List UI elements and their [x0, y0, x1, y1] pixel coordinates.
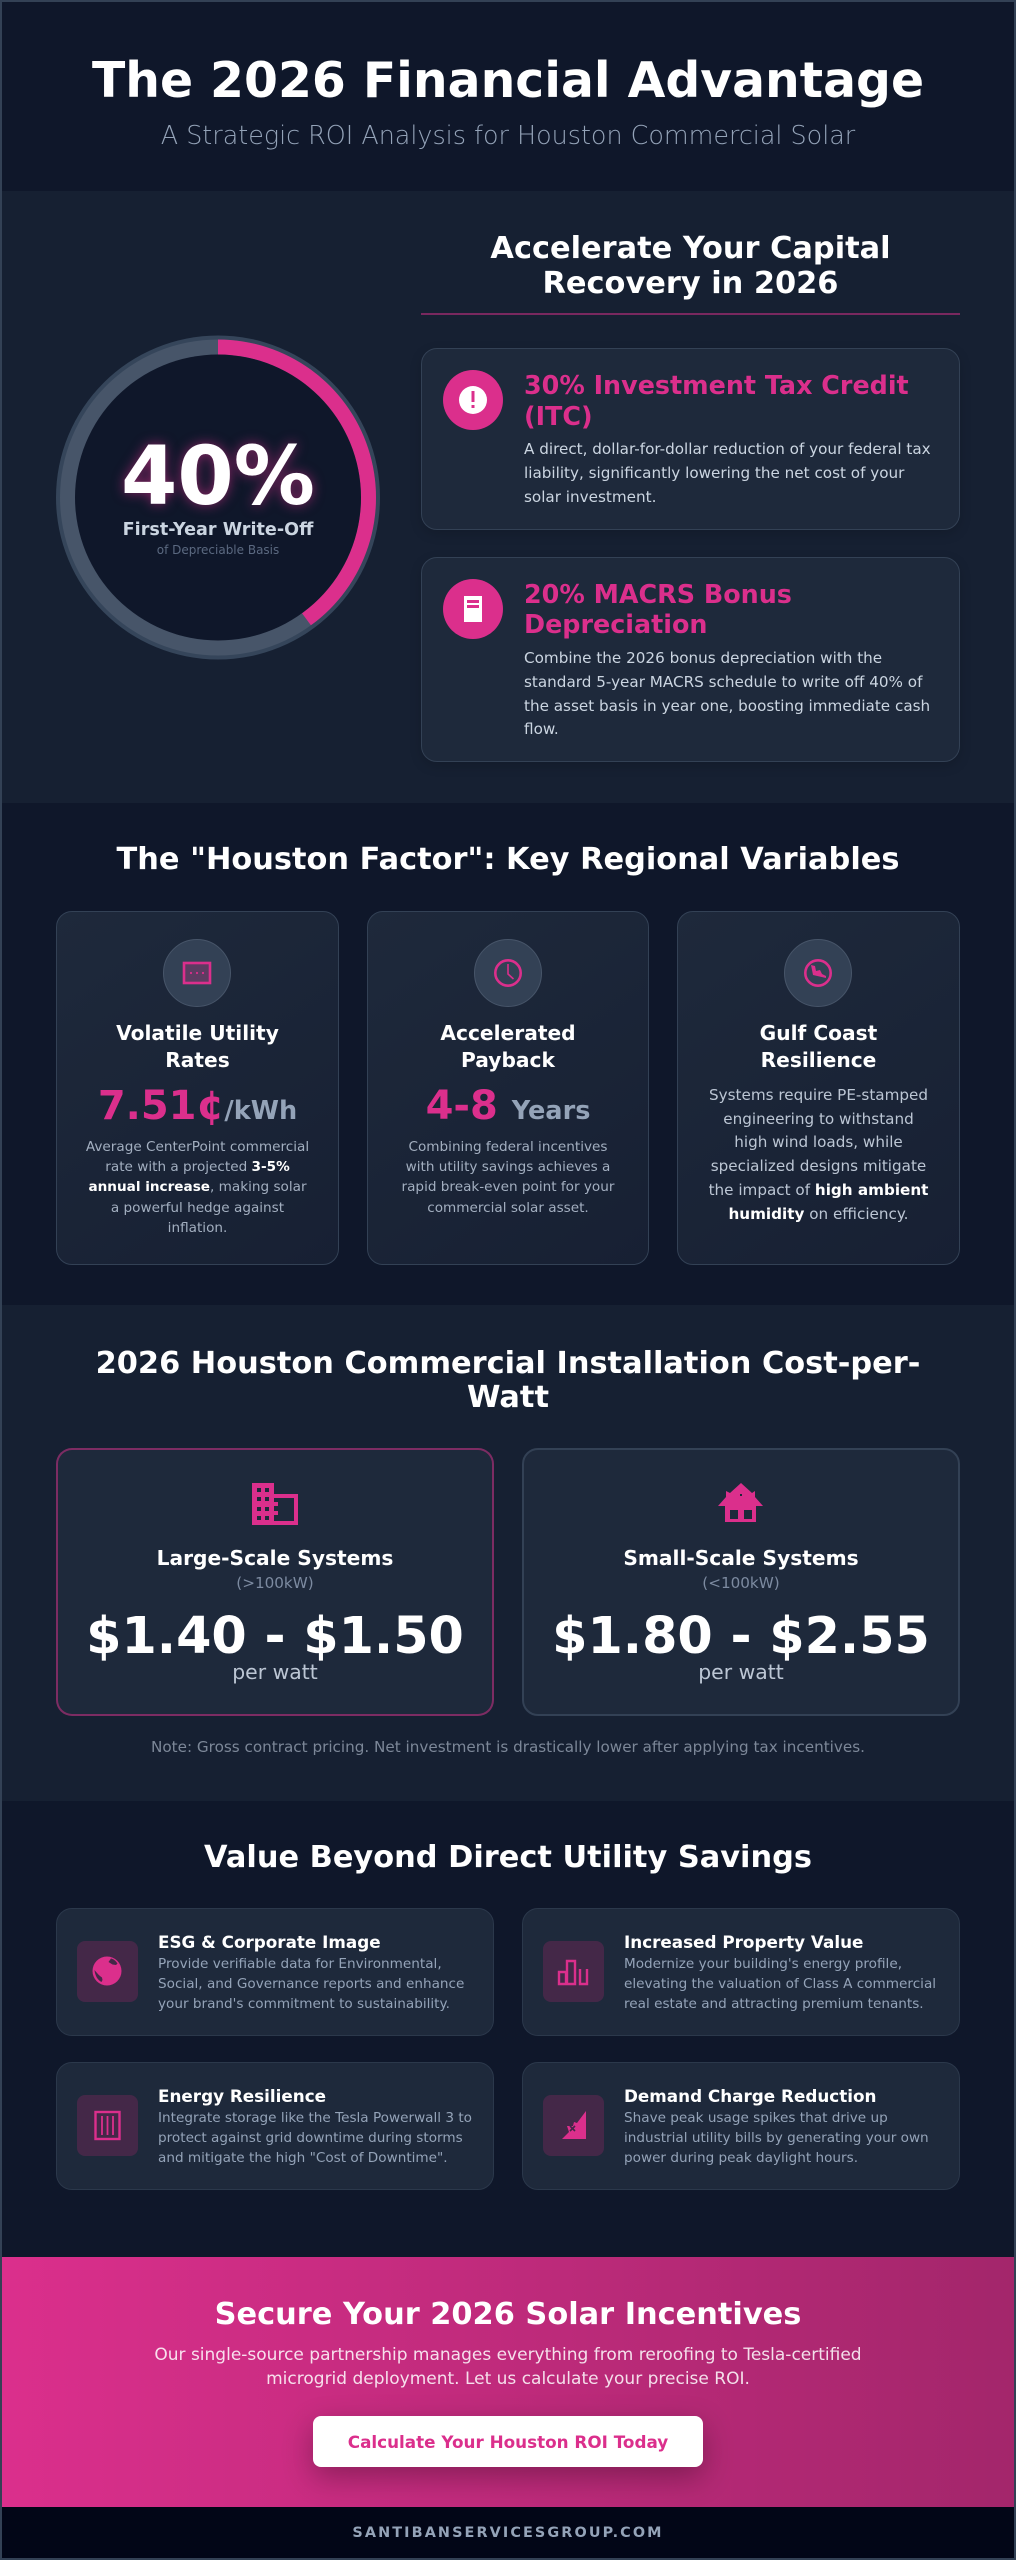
card text: Systems require PE-stamped — [709, 1086, 928, 1104]
price range: $1.40 - $1.50 — [86, 1606, 464, 1665]
card title: Increased Property Value — [624, 1932, 863, 1952]
card text: commercial solar asset. — [427, 1200, 589, 1216]
card text — [524, 440, 931, 506]
card: large-scale systems — [56, 1448, 494, 1716]
card text: the impact of high ambient — [709, 1181, 928, 1199]
call to action banner — [0, 2257, 1016, 2507]
card text: A direct, dollar-for-dollar reduction of your federal tax — [524, 440, 931, 458]
card: volatile utility rates — [56, 911, 339, 1265]
header panel — [0, 0, 1016, 191]
card text: power during peak daylight hours. — [624, 2150, 858, 2166]
card title — [760, 1021, 877, 1072]
card text: Provide verifiable data for Environmental, — [158, 1956, 442, 1972]
card text — [624, 2110, 929, 2166]
card title: (ITC) — [524, 401, 593, 431]
card text: Combining federal incentives — [408, 1139, 608, 1155]
card text — [402, 1139, 614, 1216]
gauge: 40 percent write-off — [56, 336, 380, 660]
unit label: per watt — [698, 1660, 784, 1684]
card title: Payback — [461, 1048, 555, 1072]
card: property value — [522, 1908, 960, 2036]
card text: and mitigate the high "Cost of Downtime". — [158, 2150, 448, 2166]
footnote: Note: Gross contract pricing. Net investment is drastically lower after applying tax incentives. — [151, 1738, 865, 1756]
heading: Recovery in 2026 — [543, 266, 838, 301]
divider line — [421, 313, 960, 315]
card title — [524, 578, 792, 639]
icon: clock — [474, 939, 542, 1007]
card: investment tax credit — [421, 348, 960, 530]
card text: Combine the 2026 bonus depreciation with the — [524, 649, 882, 667]
button: Calculate Your Houston ROI Today — [348, 2432, 668, 2452]
card text: the asset basis in year one, boosting immediate cash — [524, 697, 930, 715]
card text: flow. — [524, 720, 559, 738]
card title: Small-Scale Systems — [623, 1546, 859, 1570]
card text: liability, significantly lowering the net cost of your — [524, 464, 904, 482]
icon: alert — [443, 370, 503, 430]
card text: Modernize your building's energy profile, — [624, 1956, 902, 1972]
subtitle: A Strategic ROI Analysis for Houston Commercial Solar — [161, 120, 855, 150]
card text: inflation. — [168, 1220, 227, 1236]
card text — [158, 1956, 464, 2012]
icon: peak shaving — [543, 2095, 604, 2156]
card text: Shave peak usage spikes that drive up — [624, 2110, 888, 2126]
card text — [524, 649, 930, 738]
card text — [158, 2110, 472, 2166]
footer: SANTIBANSERVICESGROUP.COM — [352, 2525, 664, 2541]
card title: Volatile Utility — [116, 1021, 279, 1045]
heading: Watt — [467, 1380, 549, 1415]
heading — [490, 231, 891, 301]
panel: Houston factor — [0, 803, 1016, 1305]
gauge label: First-Year Write-Off — [123, 520, 313, 540]
heading: 2026 Houston Commercial Installation Cost-per- — [96, 1346, 920, 1381]
panel: value beyond savings — [0, 1801, 1016, 2257]
icon: building — [252, 1483, 298, 1525]
card title: Demand Charge Reduction — [624, 2086, 876, 2106]
size range: (<100kW) — [702, 1574, 780, 1592]
card text — [624, 1956, 936, 2012]
card title: Resilience — [761, 1048, 876, 1072]
card title: Energy Resilience — [158, 2086, 326, 2106]
footer — [0, 2507, 1016, 2560]
card text: elevating the valuation of Class A commercial — [624, 1976, 936, 1992]
size range: (>100kW) — [236, 1574, 314, 1592]
card text: annual increase, making solar — [88, 1179, 307, 1195]
card text — [86, 1139, 309, 1236]
icon: meter — [163, 939, 231, 1007]
card: demand charge reduction — [522, 2062, 960, 2190]
card title: Gulf Coast — [760, 1021, 877, 1045]
heading: The "Houston Factor": Key Regional Variables — [117, 842, 899, 877]
card title: 20% MACRS Bonus — [524, 578, 792, 608]
card text: with utility savings achieves a — [406, 1159, 610, 1175]
card: ESG — [56, 1908, 494, 2036]
card text: engineering to withstand — [723, 1110, 914, 1128]
panel: cost per watt — [0, 1305, 1016, 1801]
card text: rate with a projected 3-5% — [105, 1159, 290, 1175]
icon: battery — [77, 2095, 138, 2156]
button — [313, 2416, 703, 2467]
icon: bar chart — [543, 1941, 604, 2002]
body text: microgrid deployment. Let us calculate your precise ROI. — [266, 2369, 750, 2389]
card text: standard 5-year MACRS schedule to write off 40% of — [524, 673, 922, 691]
card: MACRS bonus depreciation — [421, 557, 960, 762]
panel: capital recovery — [0, 191, 1016, 803]
gauge sublabel: of Depreciable Basis — [157, 543, 279, 557]
card text: a powerful hedge against — [111, 1200, 284, 1216]
card text: high wind loads, while — [734, 1133, 903, 1151]
card text: your brand's commitment to sustainability. — [158, 1996, 450, 2012]
card title — [524, 370, 909, 431]
gauge value: 40% — [121, 430, 315, 524]
price range: $1.80 - $2.55 — [552, 1606, 930, 1665]
card text: humidity on efficiency. — [728, 1205, 909, 1223]
card title: Rates — [165, 1048, 230, 1072]
card text: Average CenterPoint commercial — [86, 1139, 309, 1155]
card text: rapid break-even point for your — [402, 1179, 614, 1195]
gauge ring — [56, 336, 380, 660]
card title: ESG & Corporate Image — [158, 1932, 381, 1952]
card text: real estate and attracting premium tenants. — [624, 1996, 924, 2012]
icon: globe — [77, 1941, 138, 2002]
card title — [440, 1021, 576, 1072]
card: energy resilience — [56, 2062, 494, 2190]
card text: specialized designs mitigate — [711, 1157, 926, 1175]
title: The 2026 Financial Advantage — [92, 52, 924, 109]
body text: Our single-source partnership manages everything from reroofing to Tesla-certified — [154, 2345, 862, 2365]
heading: Accelerate Your Capital — [490, 231, 891, 266]
card text: protect against grid downtime during storms — [158, 2130, 463, 2146]
card text: solar investment. — [524, 488, 656, 506]
stat value: 4-8 Years — [426, 1083, 590, 1129]
icon: weather gauge — [784, 939, 852, 1007]
icon: server — [443, 579, 503, 639]
card: accelerated payback — [367, 911, 649, 1265]
card text — [709, 1086, 928, 1223]
heading — [96, 1346, 920, 1415]
icon: house — [718, 1483, 763, 1522]
card title: Large-Scale Systems — [157, 1546, 393, 1570]
card title — [116, 1021, 279, 1072]
unit label: per watt — [232, 1660, 318, 1684]
heading: Value Beyond Direct Utility Savings — [204, 1840, 812, 1875]
card title: Accelerated — [440, 1021, 576, 1045]
card title: 30% Investment Tax Credit — [524, 370, 909, 400]
card title: Depreciation — [524, 609, 707, 639]
card: small-scale systems — [522, 1448, 960, 1716]
card: Gulf Coast resilience — [677, 911, 960, 1265]
card text: Social, and Governance reports and enhance — [158, 1976, 464, 1992]
card text: industrial utility bills by generating your own — [624, 2130, 929, 2146]
body text — [154, 2345, 862, 2389]
card text: Integrate storage like the Tesla Powerwall 3 to — [158, 2110, 472, 2126]
stat value: 7.51¢/kWh — [98, 1083, 297, 1129]
heading: Secure Your 2026 Solar Incentives — [215, 2297, 801, 2332]
